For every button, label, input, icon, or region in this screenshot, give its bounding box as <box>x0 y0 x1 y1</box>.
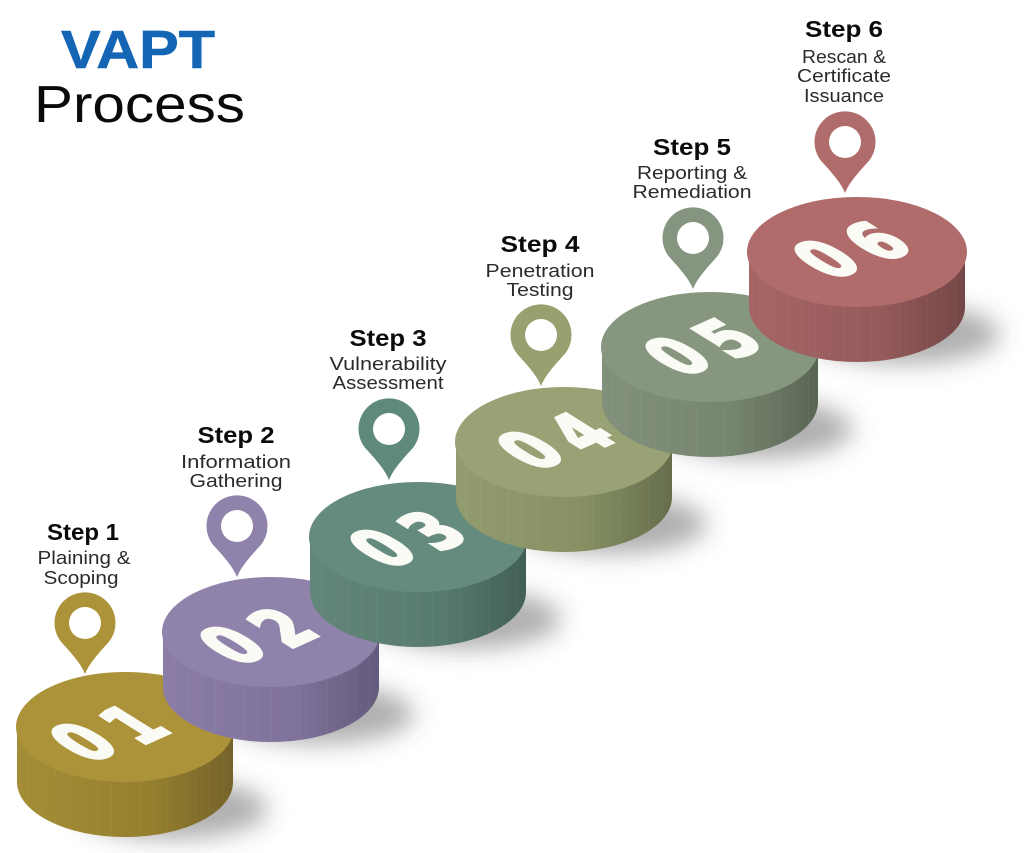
disk 03 <box>309 482 527 647</box>
disk 06 <box>747 197 967 362</box>
disk 04: 04 <box>478 400 636 485</box>
label: step 1: Scoping <box>44 568 118 588</box>
label: step 2: Information <box>181 452 291 472</box>
icon: pin 6 <box>814 111 876 193</box>
label: step 5: Step 5 <box>653 134 731 160</box>
icon: pin 3 <box>358 398 420 480</box>
label: step 2 <box>181 422 291 491</box>
label: step 4: Testing <box>506 280 574 300</box>
label: step 6 <box>797 16 891 106</box>
label: step 5: Reporting & <box>637 163 747 183</box>
disk 05 <box>601 292 819 457</box>
icon: pin 4 <box>510 304 572 386</box>
label: step 3: Vulnerability <box>330 354 446 374</box>
disk shadows <box>78 304 1000 839</box>
label: step 5 <box>632 134 752 202</box>
label: step 3 <box>330 325 446 393</box>
icon: pin 5 <box>662 207 724 289</box>
disk 06: 06 <box>774 209 932 294</box>
label: step 3: Assessment <box>332 373 444 393</box>
title: Process <box>34 76 245 134</box>
label: step 6: Certificate <box>797 66 891 86</box>
label: step 2: Gathering <box>190 471 282 491</box>
title <box>34 20 245 134</box>
label: step 5: Remediation <box>632 182 752 202</box>
disk 04 <box>455 387 673 552</box>
label: step 2: Step 2 <box>198 422 274 448</box>
disk 05: 05 <box>625 306 783 391</box>
label: step 3: Step 3 <box>350 325 426 351</box>
label: step 1 <box>38 519 130 588</box>
disk 02: 02 <box>180 595 338 680</box>
label: step 6: Step 6 <box>805 16 883 42</box>
disk 03: 03 <box>330 498 488 583</box>
label: step 1: Plaining & <box>38 548 130 568</box>
label: step 1: Step 1 <box>47 519 119 545</box>
label: step 6: Issuance <box>804 86 884 106</box>
label: step 4 <box>486 231 594 300</box>
label: step 6: Rescan & <box>802 47 886 67</box>
disk 01: 01 <box>31 692 189 777</box>
label: step 4: Penetration <box>486 261 594 281</box>
disk 02 <box>162 577 380 742</box>
label: step 4: Step 4 <box>500 231 580 257</box>
icon: pin 2 <box>206 495 268 577</box>
icon: pin 1 <box>54 592 116 674</box>
disk 01 <box>16 672 234 837</box>
title: VAPT <box>61 20 215 80</box>
